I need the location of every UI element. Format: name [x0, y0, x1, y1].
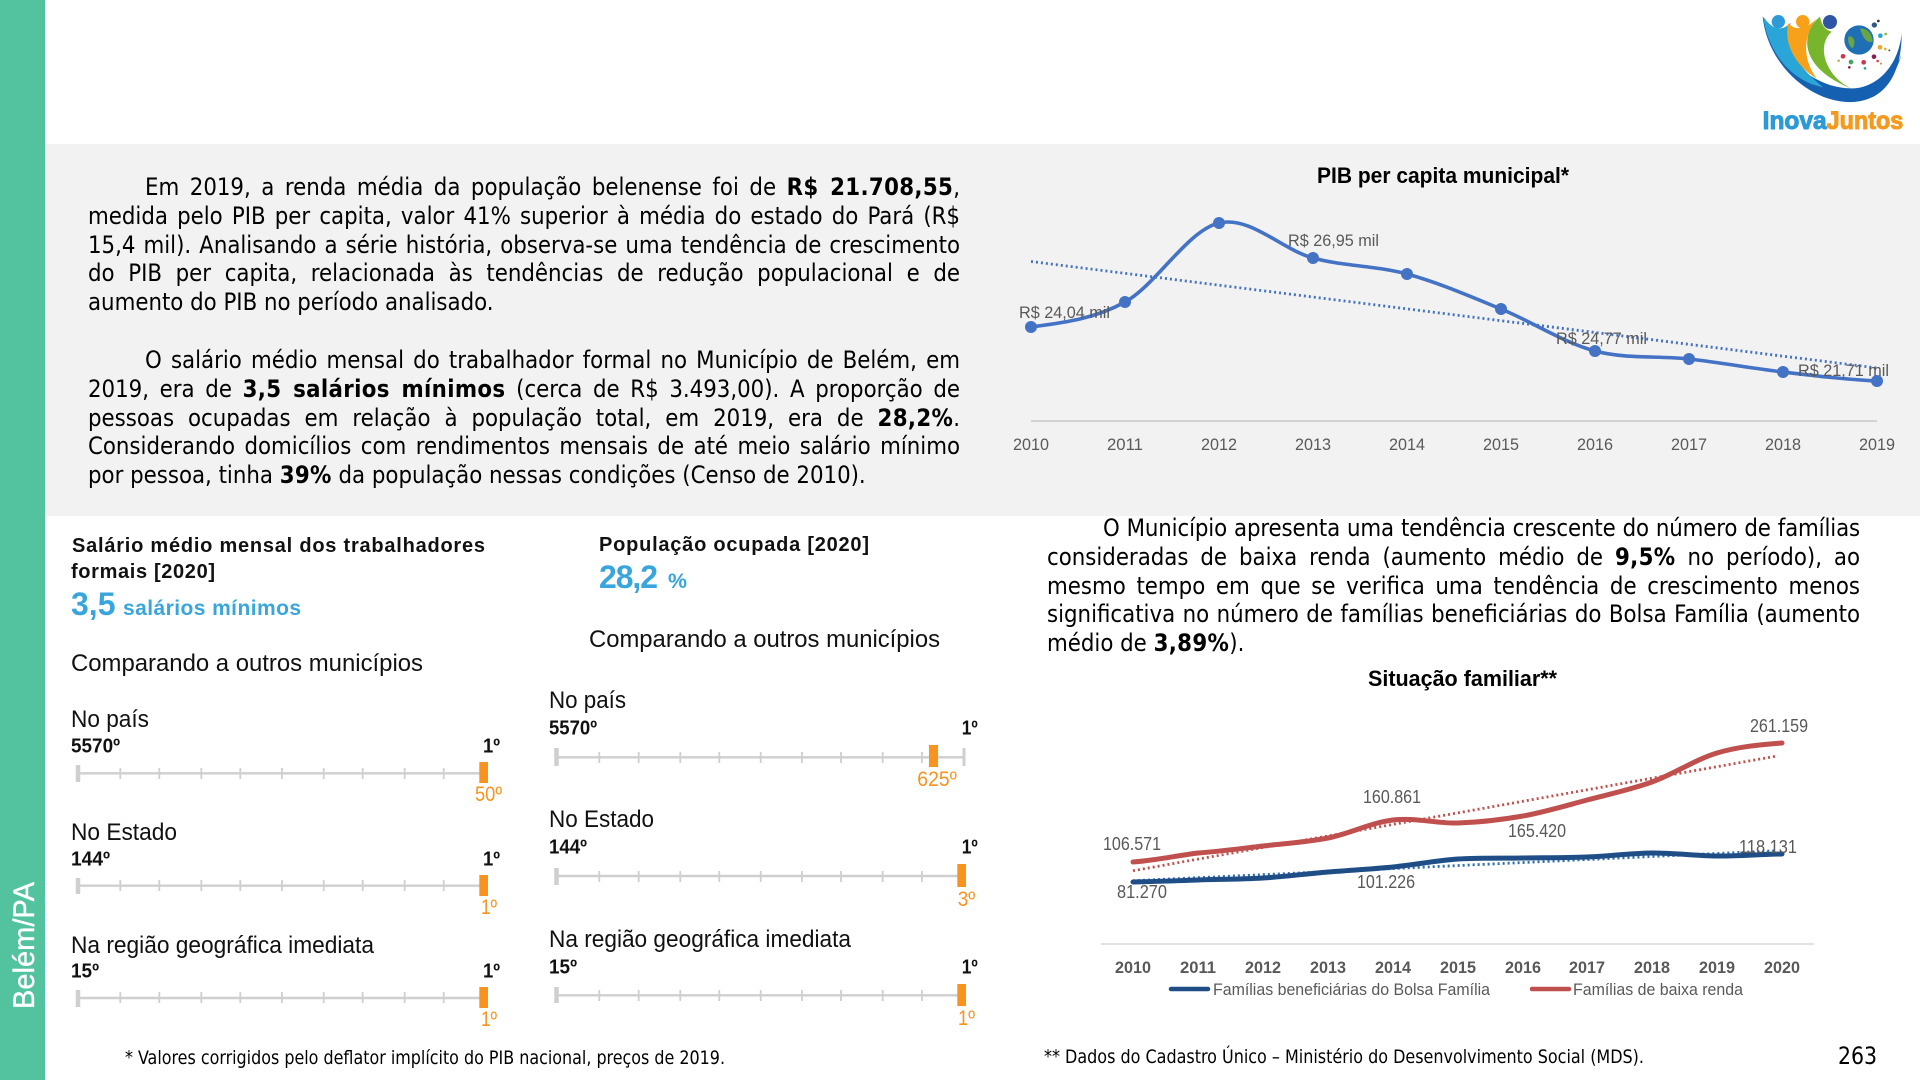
text block: famílias de baixa renda: O Município apresenta uma tendência crescente do número de famílias	[1103, 514, 1860, 542]
data labels: 165.420	[1508, 821, 1566, 841]
rank: no país	[71, 706, 502, 806]
legend: Famílias beneficiárias do Bolsa Família	[1213, 980, 1491, 999]
year axis labels: 2017	[1569, 958, 1605, 977]
rank: no estado: 144º	[549, 836, 587, 858]
year axis labels: 2013	[1310, 958, 1346, 977]
data labels: 261.159	[1750, 716, 1808, 736]
rank: região geográfica: 1º	[958, 1007, 975, 1030]
text block: famílias de baixa renda	[1047, 514, 1860, 657]
year axis labels: 2018	[1765, 435, 1801, 454]
year axis labels: 2013	[1295, 435, 1331, 454]
value	[71, 586, 301, 622]
trend: baixa renda	[1133, 756, 1777, 871]
rank: região geográfica	[549, 926, 978, 1030]
heading: Salário médio mensal dos trabalhadores	[72, 535, 485, 557]
text block: salário médio: Considerando domicílios com rendimentos mensais de até meio salário mínimo	[88, 432, 960, 460]
year axis labels: 2010	[1013, 435, 1049, 454]
data labels	[1019, 231, 1889, 380]
legend	[1171, 980, 1744, 999]
year axis labels: 2012	[1245, 958, 1281, 977]
value	[599, 559, 687, 595]
text block: famílias de baixa renda: mesmo tempo em que se verifica uma tendência de crescimento menos	[1047, 572, 1860, 600]
rank: região geográfica: 15º	[549, 956, 577, 978]
data labels: R$ 24,04 mil	[1019, 303, 1110, 322]
year axis labels: 2018	[1634, 958, 1670, 977]
rank: no estado: 1º	[962, 836, 978, 858]
rank: no país	[549, 687, 978, 791]
logo: InovaJuntos: Inova	[1763, 107, 1828, 135]
heading	[71, 535, 485, 583]
rank: no estado	[71, 819, 500, 919]
data labels: R$ 26,95 mil	[1288, 231, 1379, 250]
footnote: cadastro único: ** Dados do Cadastro Único – Ministério do Desenvolvimento Social (MDS).	[1044, 1044, 1644, 1068]
rank: região geográfica: Na região geográfica imediata	[549, 926, 852, 953]
rank: no país: 1º	[962, 718, 978, 740]
text block: renda média: do PIB per capita, relacionada às tendências de redução populacional e de	[88, 259, 960, 287]
text block: salário médio	[88, 346, 960, 489]
rank: no estado: 3º	[958, 888, 975, 911]
legend: Famílias de baixa renda	[1573, 980, 1744, 999]
rank: região geográfica: 1º	[962, 956, 978, 978]
rank: no estado: 1º	[481, 896, 497, 919]
data labels: 101.226	[1357, 872, 1415, 892]
value: salários mínimos	[123, 597, 301, 620]
value: 28,2	[599, 559, 658, 595]
year axis labels: 2015	[1483, 435, 1519, 454]
rank: no estado: No Estado	[549, 806, 654, 833]
year axis labels: 2020	[1764, 958, 1800, 977]
text block: salário médio: O salário médio mensal do trabalhador formal no Município de Belém, em	[145, 346, 960, 374]
text block: famílias de baixa renda: médio de 3,89%).	[1047, 629, 1244, 657]
rank: no país: 1º	[483, 736, 500, 758]
rank: no estado: 1º	[483, 848, 500, 870]
rank: região geográfica: 1º	[481, 1008, 497, 1031]
year axis labels: 2010	[1115, 958, 1151, 977]
data labels	[1103, 716, 1808, 902]
year axis labels: 2019	[1859, 435, 1895, 454]
year axis labels: 2014	[1389, 435, 1425, 454]
text block: renda média: aumento do PIB no período analisado.	[88, 288, 494, 316]
text block: famílias de baixa renda: consideradas de baixa renda (aumento médio de 9,5% no período), ao	[1047, 543, 1860, 571]
subheading: Comparando a outros municípios	[71, 650, 423, 677]
rank: no país: No país	[549, 687, 626, 714]
rank: no estado	[549, 806, 978, 911]
rank: no estado: No Estado	[71, 819, 177, 846]
rank: no país: 5570º	[71, 736, 120, 758]
footnote: deflator: * Valores corrigidos pelo deflator implícito do PIB nacional, preços de 2019.	[125, 1047, 725, 1069]
year axis labels: 2016	[1505, 958, 1541, 977]
rank: região geográfica: Na região geográfica imediata	[71, 932, 375, 959]
rank: no país: 50º	[475, 783, 502, 806]
year axis labels: 2016	[1577, 435, 1613, 454]
year axis labels: 2017	[1671, 435, 1707, 454]
value: %	[668, 570, 687, 593]
year axis labels: 2011	[1107, 435, 1143, 454]
rank: região geográfica: 1º	[483, 960, 500, 982]
chart title: PIB per capita municipal*	[1317, 163, 1569, 188]
text block: famílias de baixa renda: significativa no número de famílias beneficiárias do Bolsa Família (aumento	[1047, 600, 1860, 628]
heading: População ocupada [2020]	[599, 534, 869, 556]
year axis labels: 2011	[1180, 958, 1216, 977]
text block: salário médio: por pessoa, tinha 39% da população nessas condições (Censo de 2010).	[88, 461, 866, 489]
series: baixa renda	[1133, 743, 1782, 862]
data series	[1025, 217, 1883, 387]
rank: no país: 5570º	[549, 718, 597, 740]
data labels: 118.131	[1739, 837, 1797, 857]
page number: 263	[1838, 1042, 1877, 1070]
data labels: R$ 21,71 mil	[1798, 361, 1889, 380]
trend: Bolsa Família	[1133, 851, 1777, 881]
logo: InovaJuntos	[1762, 15, 1903, 135]
grey top panel	[45, 144, 1920, 516]
data labels: R$ 24,77 mil	[1556, 329, 1647, 348]
text block: renda média: medida pelo PIB per capita, valor 41% superior à média do estado do Pará (R$	[88, 202, 960, 230]
x axis	[1101, 943, 1814, 945]
rank: no país: No país	[71, 706, 149, 733]
value: 3,5	[71, 586, 115, 622]
year axis labels: 2015	[1440, 958, 1476, 977]
side band label: Belém/PA	[8, 882, 41, 1009]
x axis	[1031, 420, 1877, 422]
year axis labels: 2019	[1699, 958, 1735, 977]
rank: no país: 625º	[917, 768, 957, 791]
rank: região geográfica	[71, 932, 500, 1031]
text block: salário médio: 2019, era de 3,5 salários mínimos (cerca de R$ 3.493,00). A proporção de	[88, 375, 960, 403]
data labels: 160.861	[1363, 787, 1421, 807]
chart title: Situação familiar**	[1368, 666, 1557, 691]
trend line	[1031, 262, 1877, 368]
year axis labels: 2012	[1201, 435, 1237, 454]
series: Bolsa Família	[1133, 853, 1782, 882]
subheading: Comparando a outros municípios	[589, 626, 940, 653]
data labels: 106.571	[1103, 834, 1161, 854]
side band: Belém/PA	[0, 0, 45, 1080]
text block: renda média: 15,4 mil). Analisando a série história, observa-se uma tendência de crescimento	[88, 231, 960, 259]
year axis labels	[1013, 435, 1895, 454]
text block: renda média	[88, 173, 960, 316]
text block: renda média: Em 2019, a renda média da população belenense foi de R$ 21.708,55,	[145, 173, 960, 201]
logo: InovaJuntos: Juntos	[1827, 107, 1903, 135]
year axis labels	[1115, 958, 1800, 977]
rank: no estado: 144º	[71, 848, 110, 870]
year axis labels: 2014	[1375, 958, 1412, 977]
data labels: 81.270	[1117, 882, 1167, 902]
text block: salário médio: pessoas ocupadas em relação à população total, em 2019, era de 28,2%.	[88, 404, 960, 432]
heading: formais [2020]	[71, 561, 215, 583]
rank: região geográfica: 15º	[71, 960, 99, 982]
